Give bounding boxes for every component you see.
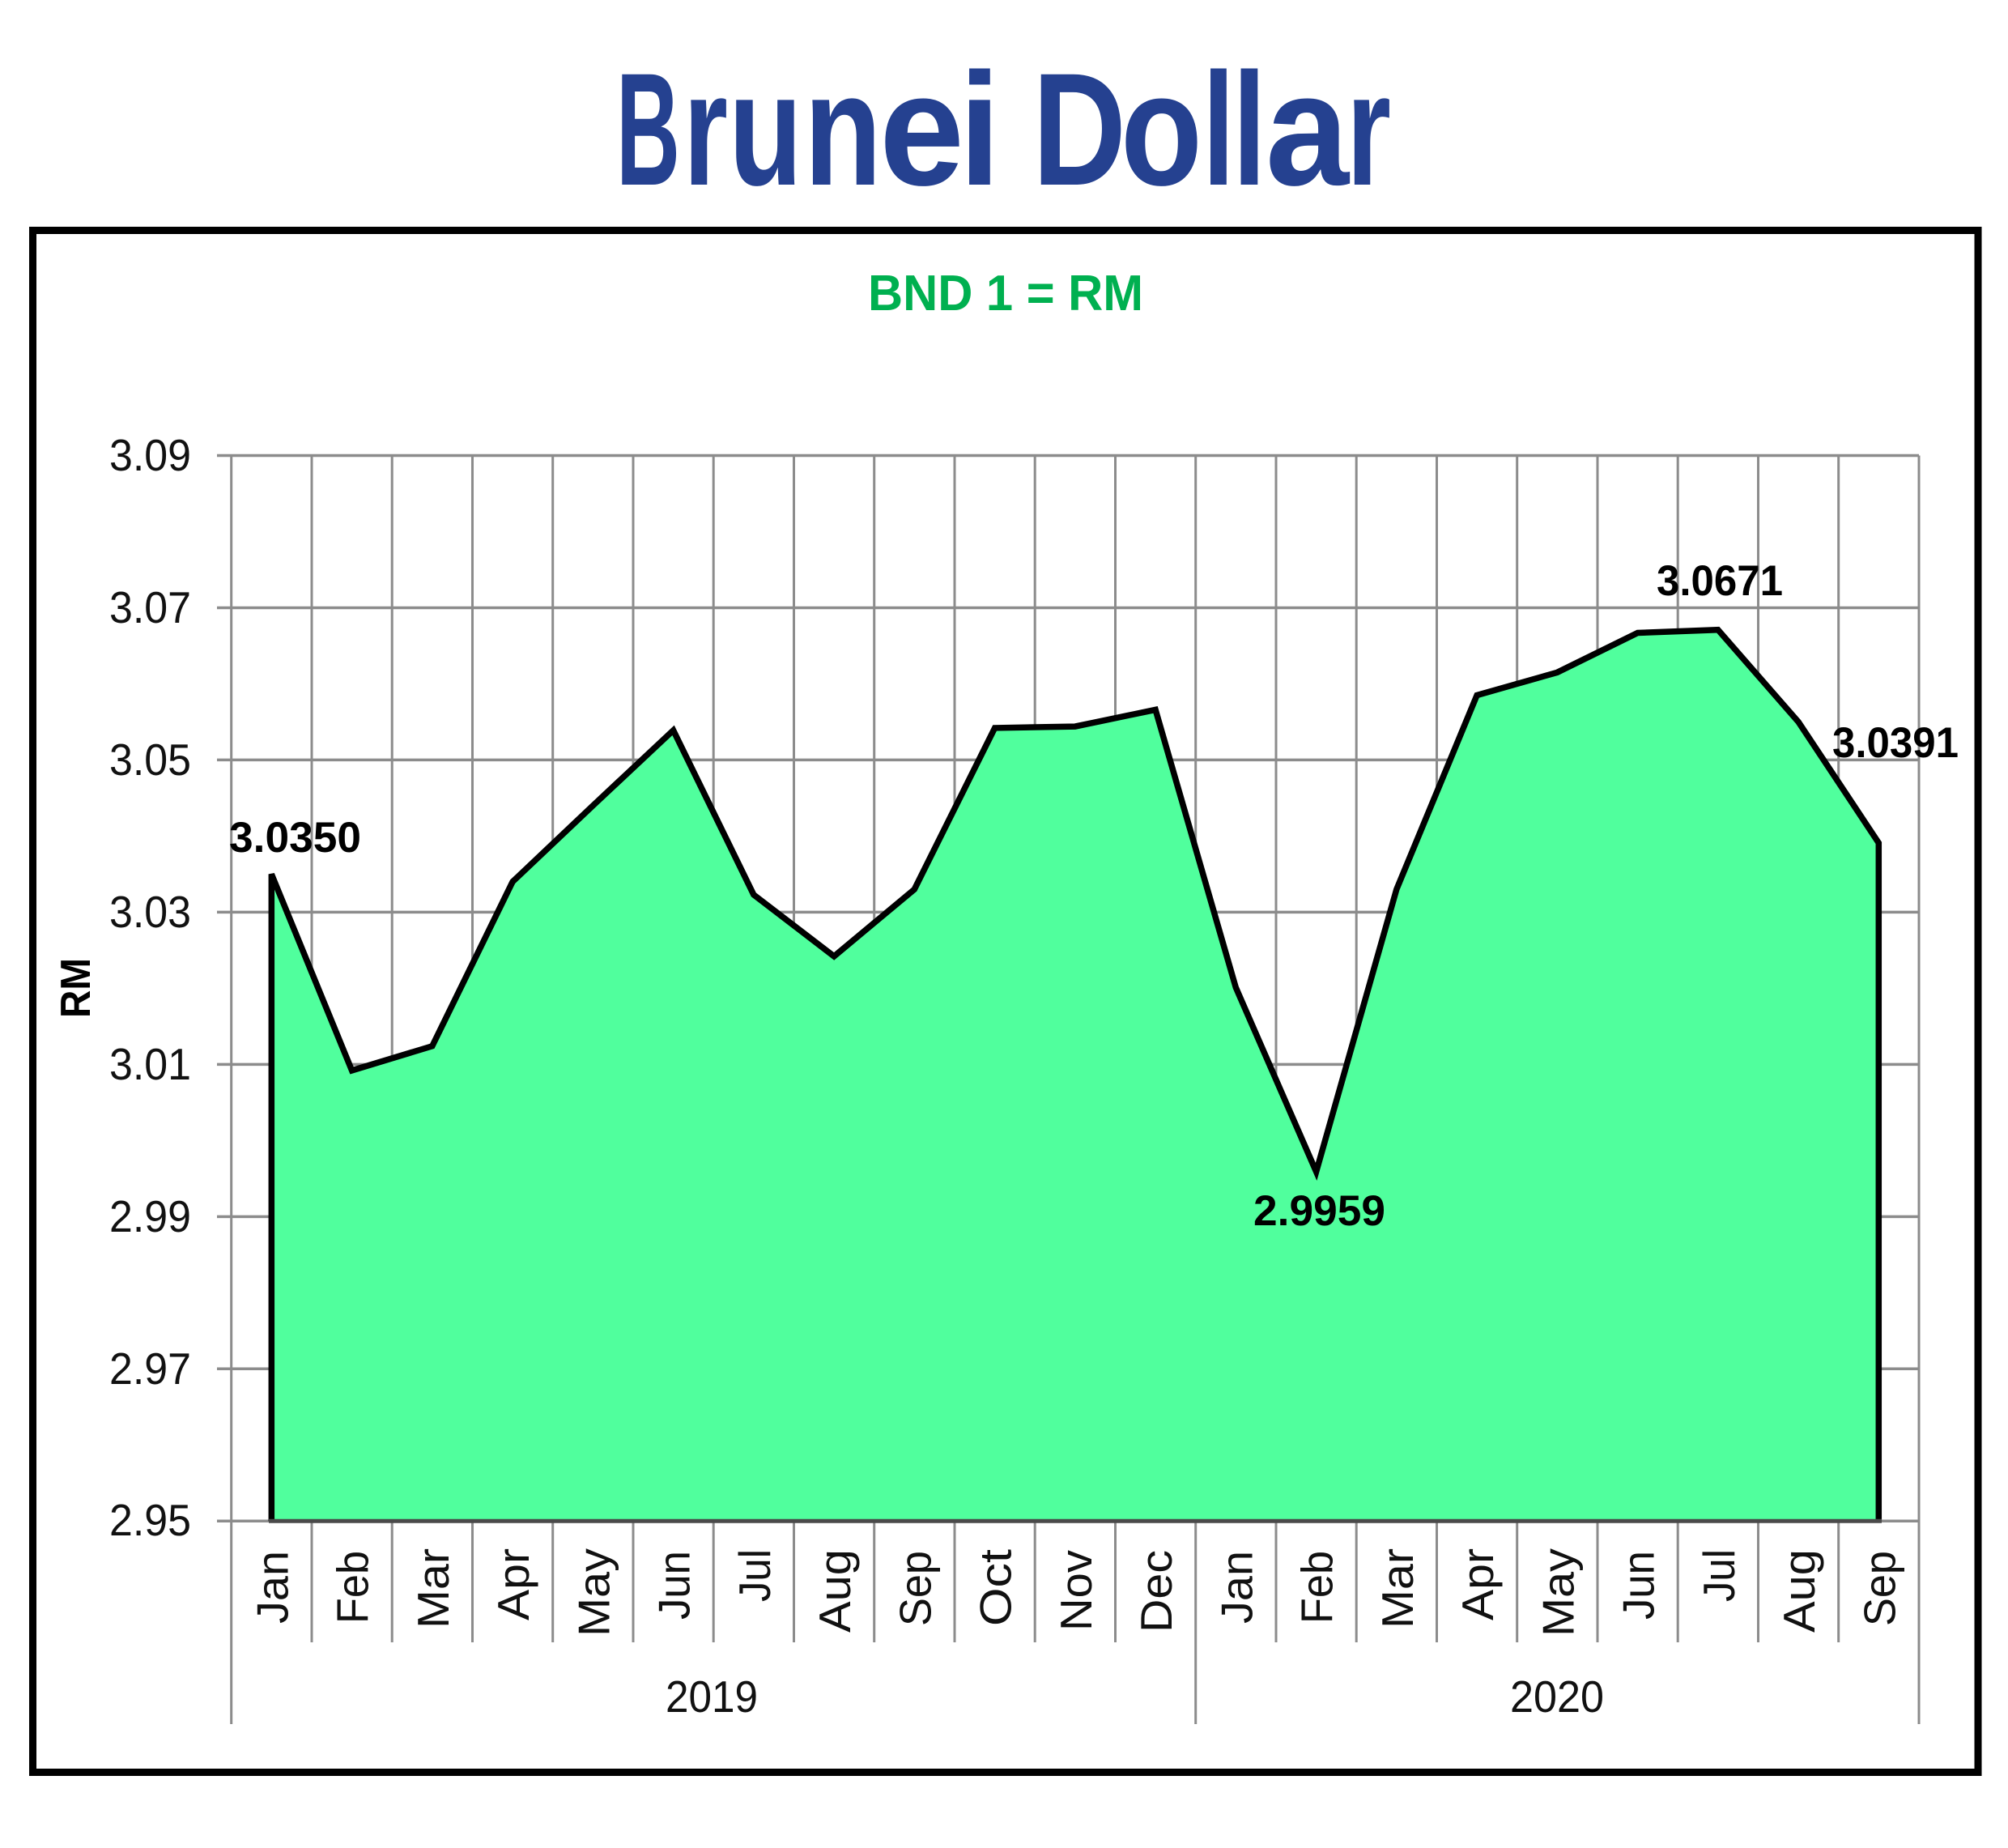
data labels: 3.0391 xyxy=(1832,719,1959,767)
baseline edge xyxy=(269,1519,1882,1523)
month labels: Jan xyxy=(1211,1551,1261,1624)
title: i xyxy=(959,40,1001,219)
year labels: 2020 xyxy=(1510,1671,1604,1722)
month labels: Dec xyxy=(1131,1550,1181,1633)
y axis labels xyxy=(109,430,191,1545)
y axis labels: 3.09 xyxy=(109,430,191,480)
month labels: May xyxy=(1533,1548,1583,1637)
title: l xyxy=(1202,40,1235,219)
y axis labels: 3.07 xyxy=(109,582,191,632)
year labels: 2019 xyxy=(666,1671,758,1722)
month labels: Apr xyxy=(1453,1548,1503,1620)
month labels: Jul xyxy=(1694,1549,1744,1602)
month labels: May xyxy=(568,1548,619,1637)
title: n xyxy=(804,40,882,219)
month labels: Sep xyxy=(890,1551,940,1626)
title: e xyxy=(879,40,964,219)
month labels: Mar xyxy=(1372,1548,1423,1629)
area outline xyxy=(271,630,1878,1521)
month labels: Feb xyxy=(1292,1551,1342,1624)
title: B xyxy=(616,40,680,219)
chart subtitle: BND 1 = RM xyxy=(868,266,1143,321)
grid lines xyxy=(217,455,1919,1724)
data labels: 3.0350 xyxy=(229,814,361,862)
data labels xyxy=(229,557,1959,1235)
month labels xyxy=(247,1548,1904,1637)
month labels: Aug xyxy=(810,1549,860,1633)
data labels: 3.0671 xyxy=(1657,557,1783,605)
title: D xyxy=(1032,40,1126,219)
month labels: Aug xyxy=(1774,1549,1824,1633)
title: l xyxy=(1232,40,1266,219)
month labels: Jul xyxy=(730,1549,780,1602)
y axis title: RM xyxy=(53,958,100,1018)
title: r xyxy=(683,40,728,219)
month labels: Jan xyxy=(247,1551,297,1624)
title: r xyxy=(1346,40,1391,219)
title: u xyxy=(729,40,802,219)
data labels: 2.9959 xyxy=(1253,1187,1385,1235)
month labels: Jun xyxy=(649,1551,700,1620)
y axis labels: 3.01 xyxy=(109,1039,191,1089)
month labels: Apr xyxy=(488,1548,538,1620)
y axis labels: 2.99 xyxy=(109,1191,191,1241)
month labels: Mar xyxy=(408,1548,458,1629)
month labels: Oct xyxy=(971,1549,1021,1626)
month labels: Nov xyxy=(1051,1549,1101,1631)
y axis labels: 3.03 xyxy=(109,887,191,937)
month labels: Sep xyxy=(1854,1551,1904,1626)
y axis labels: 3.05 xyxy=(109,735,191,785)
month labels: Jun xyxy=(1614,1551,1664,1620)
month labels: Feb xyxy=(328,1551,378,1624)
title: a xyxy=(1266,40,1351,219)
area fill xyxy=(271,630,1878,1521)
y axis labels: 2.97 xyxy=(109,1343,191,1394)
y axis labels: 2.95 xyxy=(109,1495,191,1545)
title: o xyxy=(1121,40,1202,219)
year labels xyxy=(666,1671,1604,1722)
area chart: exchange rate xyxy=(269,630,1882,1521)
